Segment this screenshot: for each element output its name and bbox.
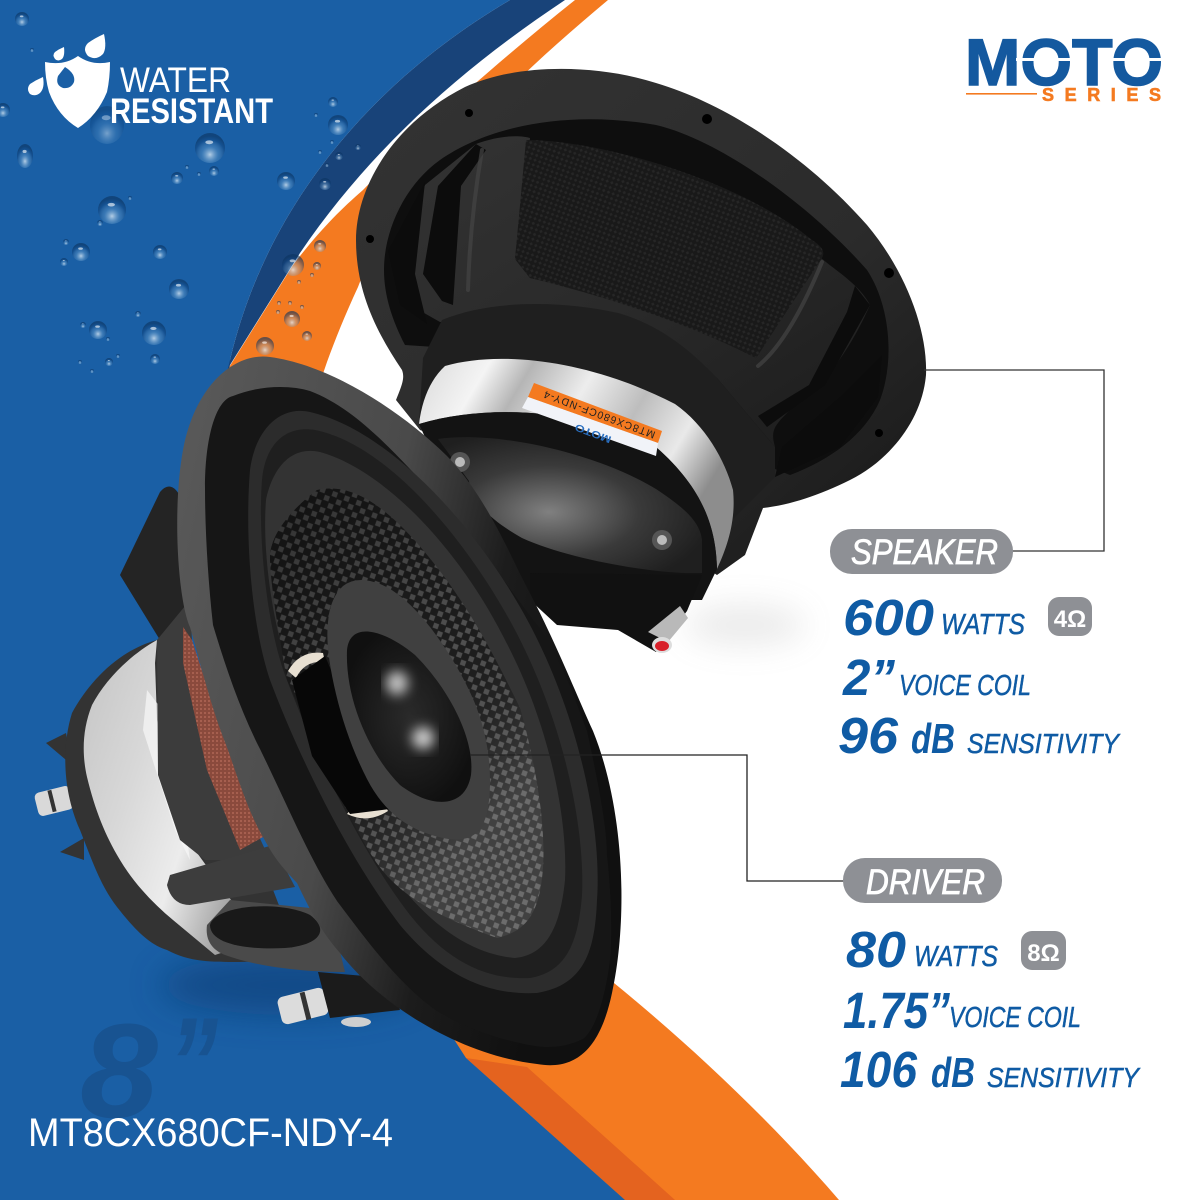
rear speaker (356, 69, 926, 653)
back dome (438, 437, 702, 573)
600 watts: 600 (843, 589, 934, 646)
panel: driver specs (840, 858, 1141, 1098)
inner opening (384, 119, 889, 475)
basket arm (157, 600, 270, 860)
shadow beneath front speaker (160, 955, 420, 1015)
base plate (530, 573, 702, 652)
silver magnet band (419, 359, 734, 569)
8 ohm badge: 8Ω (1027, 940, 1060, 967)
dark blue band (200, 0, 565, 480)
dust cap rim (327, 580, 490, 840)
voice coil: VOICE COIL (899, 670, 1031, 702)
rear speaker shadow (685, 605, 805, 645)
cone shading (270, 488, 543, 938)
motor bowl (419, 304, 775, 573)
rim flat ring (205, 387, 611, 1047)
back plate (419, 412, 717, 600)
600 watts (843, 589, 1026, 646)
sensitivity: SENSITIVITY (967, 728, 1121, 759)
front speaker (34, 357, 621, 1065)
bottom terminal (276, 972, 400, 1027)
logo: moto series: MOTO (965, 25, 1163, 99)
sensitivity (840, 1041, 1141, 1098)
cream voice coil rings (288, 653, 388, 818)
4 ohm badge (1048, 597, 1092, 636)
inner foam (265, 451, 565, 958)
heading: water resistant: RESISTANT (110, 92, 273, 131)
icon: water shield (28, 34, 110, 128)
voice coil (842, 649, 1031, 706)
sensitivity: dB (931, 1049, 975, 1096)
voice coil: 2” (842, 649, 895, 706)
carbon fibre cone (270, 488, 543, 938)
basket frame (405, 136, 870, 447)
80 watts: 80 (846, 921, 906, 978)
large 8 inch size mark: 8 (80, 997, 158, 1146)
speaker terminal (648, 606, 688, 653)
background swoosh (0, 0, 839, 1200)
lower basket (207, 900, 345, 972)
sensitivity (838, 707, 1121, 764)
large 8 inch size mark (80, 990, 218, 1146)
voice coil: 1.75” (843, 982, 950, 1039)
orange swoosh bottom (430, 983, 839, 1200)
carbon back window (515, 140, 823, 358)
heading: water resistant: WATER (120, 61, 231, 100)
red fabric spider (183, 627, 263, 850)
water droplets (0, 12, 361, 378)
sensitivity: SENSITIVITY (987, 1062, 1141, 1093)
left slot windows (388, 144, 486, 324)
voice coil gap (292, 656, 390, 814)
foam surround (248, 411, 598, 993)
driver leader line (470, 755, 845, 881)
80 watts (846, 921, 999, 978)
panel: speaker specs (830, 529, 1121, 764)
rear speaker rim (356, 69, 926, 575)
blue panel (0, 0, 625, 1200)
sensitivity: 106 (840, 1041, 918, 1098)
right slot windows (758, 286, 882, 477)
screws (366, 109, 894, 550)
lower basket oval (210, 906, 320, 948)
dome highlights (386, 671, 434, 749)
80 watts: WATTS (914, 941, 999, 973)
black back plate (65, 640, 300, 962)
surround groove (261, 429, 582, 978)
basket gloss (468, 150, 822, 366)
product label: MOTO (573, 421, 613, 444)
product label (522, 383, 662, 456)
sensitivity: 96 (838, 707, 899, 764)
orange swoosh top (170, 0, 608, 470)
600 watts: WATTS (941, 609, 1026, 641)
model number: MT8CX680CF-NDY-4 (28, 1111, 393, 1155)
product label: MT8CX680CF-NDY-4 (542, 388, 657, 440)
darker orange strip (466, 1058, 675, 1200)
4 ohm badge: 4Ω (1054, 606, 1086, 633)
speaker pill: SPEAKER (851, 533, 998, 572)
rim outer (177, 357, 621, 1065)
mount lugs (46, 733, 84, 860)
voice coil (843, 982, 1081, 1039)
voice coil: VOICE COIL (949, 1002, 1081, 1034)
lower frame arm (167, 845, 295, 905)
8 ohm badge (1021, 931, 1066, 970)
logo: moto series: SERIES (1042, 85, 1161, 105)
rear terminal (34, 785, 74, 817)
upper frame wedge (120, 487, 190, 640)
heading: water resistant (110, 61, 273, 131)
silver motor band (84, 640, 260, 955)
dust cap dome (347, 631, 471, 802)
large 8 inch size mark: ” (168, 990, 218, 1136)
motor band highlight (143, 690, 190, 860)
speaker leader line (924, 370, 1104, 551)
driver pill: DRIVER (866, 863, 985, 902)
sensitivity: dB (911, 715, 955, 762)
